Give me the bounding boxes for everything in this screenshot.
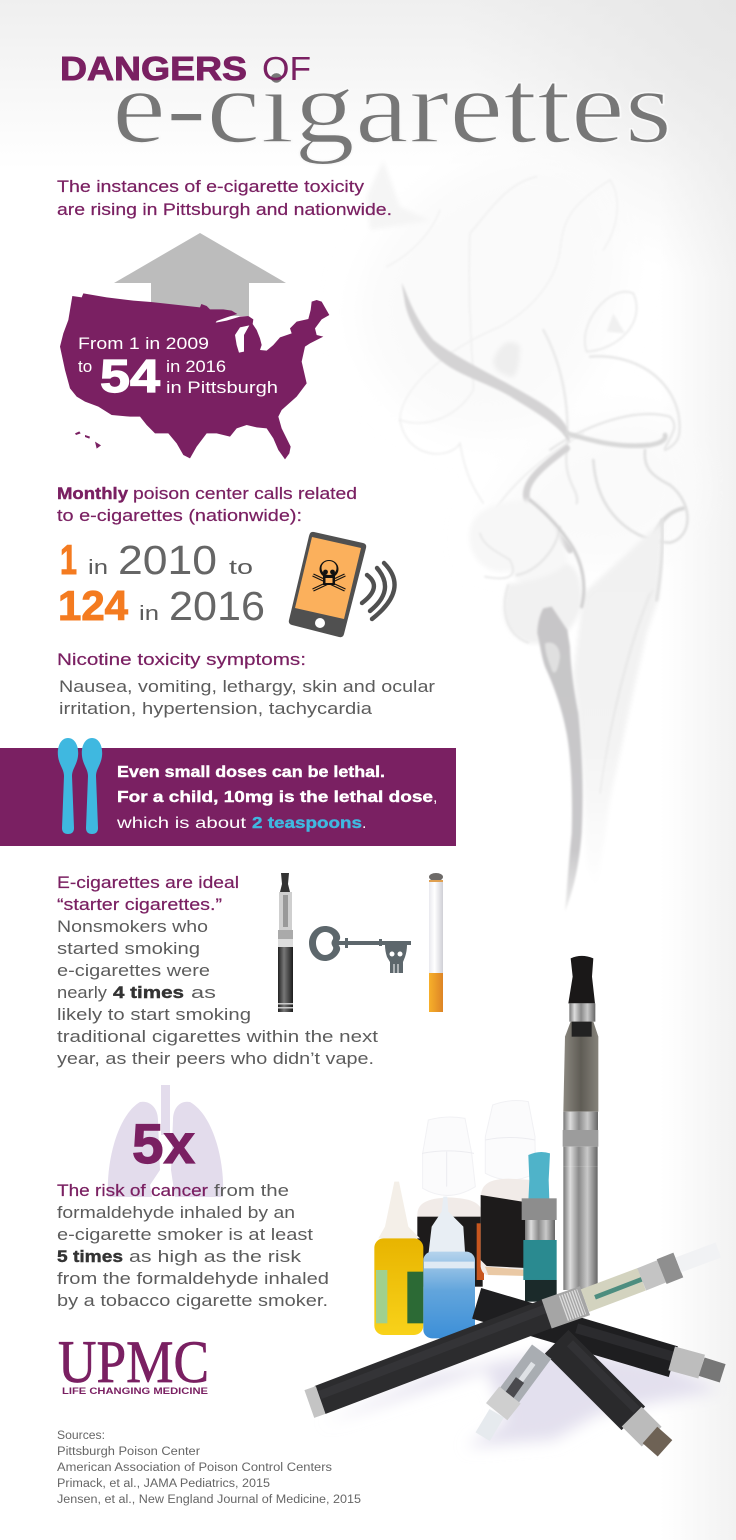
intro text	[57, 177, 392, 219]
US map with stat	[60, 293, 329, 459]
lower plume	[470, 500, 663, 912]
starter cigarettes text: started smoking	[57, 939, 200, 958]
sources: Primack, et al., JAMA Pediatrics, 2015	[57, 1478, 270, 1490]
starter cigarettes text: e-cigarettes were	[57, 961, 210, 980]
blue bottle	[423, 1197, 475, 1338]
panel: lethal dose callout: Even small doses can be lethal.	[117, 764, 385, 781]
cancer risk text: formaldehyde inhaled by an	[57, 1203, 295, 1222]
sources: American Association of Poison Control Centers	[57, 1462, 332, 1474]
nicotine symptoms: Nausea, vomiting, lethargy, skin and ocular	[59, 677, 435, 696]
sources: Pittsburgh Poison Center	[57, 1446, 200, 1458]
teal atomizer	[522, 1152, 557, 1302]
US map with stat: 54	[100, 350, 160, 402]
poison center heading: poison center calls related	[133, 484, 357, 503]
poison call stats: in	[88, 557, 108, 579]
shadows	[323, 1350, 720, 1447]
icon: skull key	[309, 926, 411, 973]
panel: lethal dose callout: .	[362, 815, 366, 832]
panel: lethal dose callout: which is about	[116, 815, 247, 832]
poison call stats: 2010	[118, 537, 217, 583]
icon: cigarette	[429, 873, 443, 1012]
icon: phone with skull and signal	[289, 532, 395, 637]
panel: lethal dose callout: For a child, 10mg is the lethal dose	[117, 789, 433, 806]
nicotine symptoms: irritation, hypertension, tachycardia	[59, 699, 373, 718]
poison center heading: to e-cigarettes (nationwide):	[57, 506, 302, 525]
UPMC logo: LIFE CHANGING MEDICINE	[62, 1386, 208, 1397]
panel: lethal dose callout: 2 teaspoons	[252, 815, 362, 832]
arrow up	[114, 233, 286, 316]
cancer risk text: 5 times	[57, 1247, 123, 1266]
smoke illustration	[360, 155, 697, 912]
tall e-cigarette	[563, 956, 598, 1290]
starter cigarettes text: E-cigarettes are ideal	[57, 873, 239, 892]
cancer risk text: The risk of cancer	[57, 1181, 208, 1200]
icon: small e-cigarette	[278, 873, 293, 1012]
poison center heading: Monthly	[57, 484, 129, 503]
starter cigarettes text	[57, 873, 378, 1068]
poison call stats	[58, 536, 265, 629]
icon: teaspoons	[58, 738, 102, 834]
photo: e-cigarettes and liquid bottles	[309, 956, 723, 1448]
yellow bottle	[374, 1182, 423, 1335]
intro text: The instances of e-cigarette toxicity	[57, 177, 365, 196]
nicotine symptoms: Nicotine toxicity symptoms:	[57, 650, 306, 669]
smoke haze	[360, 155, 697, 567]
starter cigarettes text: likely to start smoking	[57, 1005, 251, 1024]
title: DANGERS	[60, 50, 247, 87]
cancer risk text: as high as the risk	[129, 1247, 302, 1266]
starter cigarettes text: “starter cigarettes.”	[57, 895, 222, 914]
cancer risk text: by a tobacco cigarette smoker.	[57, 1291, 328, 1310]
title: OF	[262, 50, 311, 87]
UPMC logo: UPMC	[58, 1329, 209, 1395]
back right bottle	[481, 1101, 535, 1276]
starter cigarettes text: nearly	[57, 983, 108, 1002]
lower battery	[557, 1342, 665, 1448]
upper strands	[367, 160, 687, 550]
poison call stats: in	[139, 603, 159, 625]
starter cigarettes text: traditional cigarettes within the next	[57, 1027, 378, 1046]
US map with stat: in 2016	[166, 357, 226, 376]
starter cigarettes text: as	[191, 983, 216, 1002]
panel: lethal dose callout	[0, 738, 456, 846]
intro text: are rising in Pittsburgh and nationwide.	[57, 200, 392, 219]
US map with stat: to	[78, 357, 92, 376]
sources: Jensen, et al., New England Journal of Medicine, 2015	[57, 1494, 361, 1506]
sources: Sources:	[57, 1430, 105, 1442]
nicotine symptoms	[57, 650, 435, 718]
cancer risk text: e-cigarette smoker is at least	[57, 1225, 313, 1244]
main battery and atomizer	[309, 1250, 718, 1404]
panel: lethal dose callout: ,	[433, 789, 437, 806]
silver atomizer	[483, 1352, 542, 1437]
cancer risk text	[57, 1181, 329, 1310]
starter cigarettes text: 4 times	[113, 983, 184, 1002]
US map with stat: From 1 in 2009	[78, 334, 209, 353]
poison call stats: 124	[58, 582, 129, 629]
starter cigarettes text: year, as their peers who didn’t vape.	[57, 1049, 374, 1068]
icon: lungs with 5x	[108, 1085, 223, 1197]
rear battery	[477, 1303, 723, 1373]
US map with stat: in Pittsburgh	[166, 378, 278, 397]
sources	[57, 1430, 361, 1506]
poison call stats: 1	[60, 536, 77, 583]
cancer risk text: from the formaldehyde inhaled	[57, 1269, 329, 1288]
poison center heading	[57, 484, 357, 525]
icon: lungs with 5x: 5x	[132, 1112, 195, 1175]
starter cigarettes text: Nonsmokers who	[57, 917, 208, 936]
back white bottle	[417, 1117, 484, 1287]
title: e-cigarettes	[112, 48, 672, 165]
cancer risk text: from the	[214, 1181, 289, 1200]
poison call stats: 2016	[169, 583, 265, 629]
poison call stats: to	[229, 557, 253, 579]
